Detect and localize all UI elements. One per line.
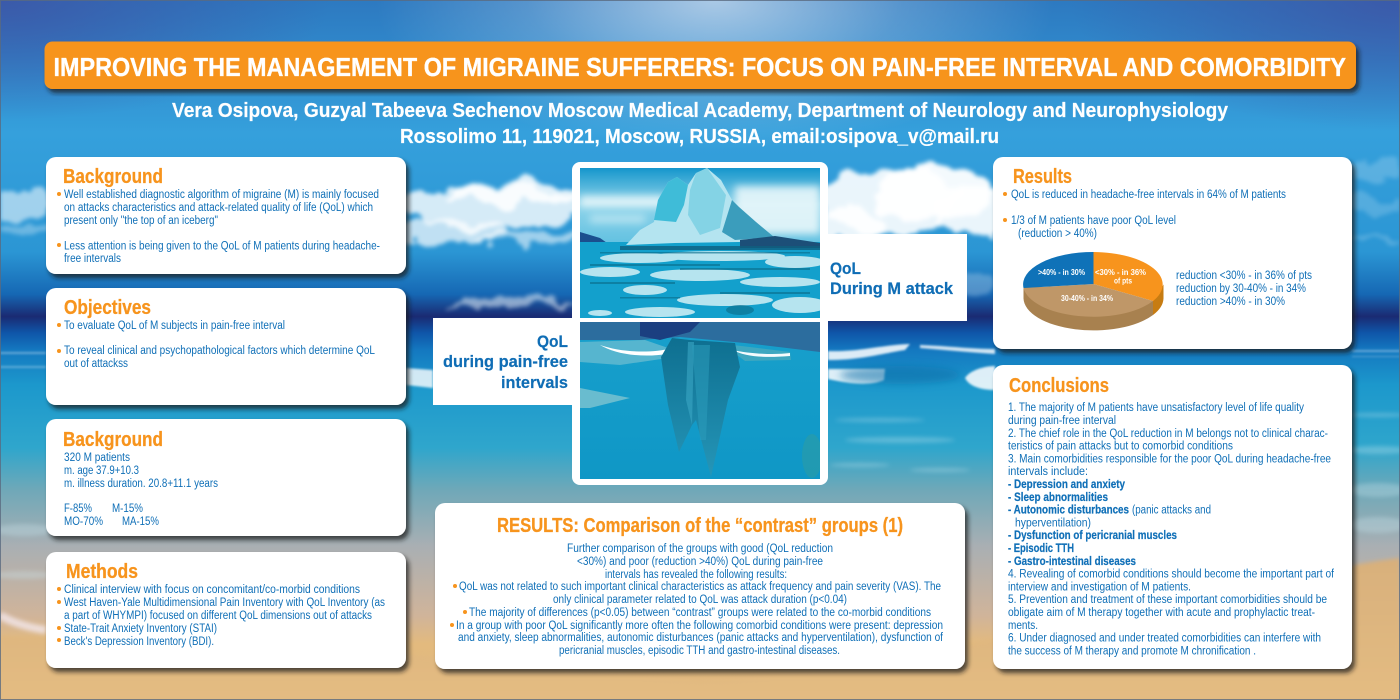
authors and affiliation [172,100,1229,148]
text block: results comparison: only clinical parameter related to QoL was attack duration (p<0.04) [553,594,847,606]
text block: patient data: F-85% [64,503,92,515]
text block: patient data: 320 M patients [64,452,130,464]
text block: results bullets: 1/3 of M patients have poor QoL level [1011,215,1176,227]
label: QoL during pain-free intervals: QoL [537,332,568,351]
heading: conclusions: Conclusions [1009,375,1109,397]
text block: conclusions list: - Depression and anxiety [1008,479,1126,491]
iceberg below water [580,322,822,479]
text block: conclusions list: - Gastro-intestinal diseases [1008,556,1136,568]
text block: background bullets: on attacks characteristics and attack-related quality of life (QoL) which [64,202,373,214]
text block: results comparison: In a group with poor QoL significantly more often the following comorbid conditions were present: depression [456,620,943,632]
heading: results: Results [1013,166,1072,188]
text block: conclusions list: 2. The chief role in the QoL reduction in M belongs not to clinical charac- [1008,428,1328,440]
text block: background bullets: free intervals [64,253,121,265]
text block: conclusions list: ments. [1008,620,1038,632]
pie chart legend [1176,270,1312,308]
text block: conclusions list: - Sleep abnormalities [1008,492,1108,504]
text block: conclusions list: teristics of pain attacks but to comorbid conditions [1008,440,1233,452]
text block: background bullets: Less attention is being given to the QoL of M patients during headache- [64,240,380,252]
text block: background bullets: Well established diagnostic algorithm of migraine (M) is mainly focused [64,189,379,201]
text block: results comparison: QoL was not related to such important clinical characteristics as attack frequency and pain severity (VAS). The [459,581,941,593]
panel: results [993,157,1352,349]
text block: methods bullets: a part of WHYMPI) focused on different QoL dimensions out of attacks [64,610,372,622]
authors and affiliation: Rossolimo 11, 119021, Moscow, RUSSIA, email:osipova_v@mail.ru [400,126,999,148]
text block: conclusions list: intervals include: [1008,466,1088,478]
text block: patient data: m. age 37.9+10.3 [64,465,139,477]
text block: results bullets: (reduction > 40%) [1018,228,1097,240]
text block: methods bullets: Clinical interview with focus on concomitant/co-morbid conditions [64,584,360,596]
text block: patient data: MA-15% [122,516,159,528]
text block: conclusions list: 5. Prevention and treatment of these important comorbidities should be [1008,594,1327,606]
label: QoL during M attack: During M attack [830,279,954,298]
text block: patient data: MO-70% [64,516,103,528]
text block: conclusions list: - Dysfunction of pericranial muscles [1008,530,1177,542]
text block: patient data: M-15% [112,503,143,515]
text block: methods bullets: Beck's Depression Inventory (BDI). [64,636,214,648]
iceberg picture [572,162,828,485]
heading: methods: Methods [66,561,138,583]
pie chart [1023,252,1164,330]
text block: objectives bullets: To evaluate QoL of M subjects in pain-free interval [64,320,285,332]
text block: background bullets: present only "the top of an iceberg" [64,215,218,227]
heading: patient background: Background [63,429,163,451]
text block: conclusions list: hyperventilation) [1015,518,1091,530]
panel: background [46,157,406,274]
title banner [44,42,1356,89]
pie chart: >40% - in 30% [1038,268,1085,277]
text block: results comparison: The majority of differences (p<0.05) between “contrast” groups were related to the co-morbid conditions [469,607,931,619]
panel: results comparison [435,503,965,669]
text block: objectives bullets [57,320,376,370]
text block: methods bullets: State-Trait Anxiety Inventory (STAI) [64,623,217,635]
text block: objectives bullets: To reveal clinical and psychopathological factors which determine QoL [64,345,376,357]
pie chart legend: reduction >40% - in 30% [1176,296,1285,308]
text block: conclusions list: 6. Under diagnosed and under treated comorbidities can interfere with [1008,632,1321,644]
panel: methods [46,552,406,668]
heading: results comparison: RESULTS: Comparison of the “contrast” groups (1) [497,515,903,537]
pie chart: 30-40% - in 34% [1061,294,1113,303]
text block: conclusions list: the success of M therapy and promote M chronification . [1008,646,1256,658]
text block: results comparison: <30%) and poor (reduction >40%) QoL during pain-free [577,556,823,568]
text block: results comparison: intervals has revealed the following results: [605,569,787,581]
text block: background bullets [57,189,380,265]
label: QoL during pain-free intervals: during pain-free [443,352,568,371]
panel: patient background [46,419,406,536]
pie chart: <30% - in 36% [1095,268,1146,277]
text block: objectives bullets: out of attackss [64,358,128,370]
heading: objectives: Objectives [64,297,151,319]
text block: methods bullets [57,584,385,648]
label: QoL during M attack: QoL [830,259,861,278]
text block: conclusions list: interview and investigation of M patients. [1008,582,1191,594]
text block: results comparison: pericranial muscles, episodic TTH and gastro-intestinal diseases. [559,645,840,657]
text block: conclusions list: 3. Main comorbidities responsible for the poor QoL during headache-free [1008,454,1331,466]
text block: conclusions list: - Episodic TTH [1008,543,1074,555]
text block: conclusions list: 1. The majority of M patients have unsatisfactory level of life quality [1008,402,1304,414]
text block: conclusions list: obligate aim of M therapy together with acute and prophylactic treat- [1008,607,1315,619]
label: QoL during pain-free intervals: intervals [501,373,568,392]
text block: conclusions list [1008,402,1335,658]
pie chart legend: reduction by 30-40% - in 34% [1176,283,1306,295]
text block: conclusions list: 4. Revealing of comorbid conditions should become the important part of [1008,568,1335,580]
panel: conclusions [993,365,1352,669]
text block: conclusions list: (panic attacks and [1132,504,1211,516]
panel: objectives [46,288,406,405]
text block: results comparison [450,543,944,657]
authors and affiliation: Vera Osipova, Guzyal Tabeeva Sechenov Moscow Medical Academy, Department of Neurology and Neurophysiology [172,100,1229,122]
text block: patient data: m. illness duration. 20.8+11.1 years [64,478,218,490]
label: QoL during pain-free intervals [433,318,573,405]
text block: results bullets [1003,189,1286,240]
text block: results comparison: Further comparison of the groups with good (QoL reduction [567,543,833,555]
heading: background: Background [63,166,163,188]
text block: conclusions list: - Autonomic disturbances [1008,504,1129,516]
label: QoL during M attack [827,234,967,321]
pie chart legend: reduction <30% - in 36% of pts [1176,270,1312,282]
text block: methods bullets: West Haven-Yale Multidimensional Pain Inventory with QoL Inventory (as [64,597,385,609]
pie chart: of pts [1114,276,1132,286]
text block: results bullets: QoL is reduced in headache-free intervals in 64% of M patients [1011,189,1286,201]
text block: conclusions list: during pain-free interval [1008,415,1116,427]
text block: results comparison: and anxiety, sleep abnormalities, autonomic disturbances (panic attacks and hyperventilation), dysfunction of [458,632,944,644]
text block: patient data [64,452,218,528]
iceberg above water [580,168,828,318]
